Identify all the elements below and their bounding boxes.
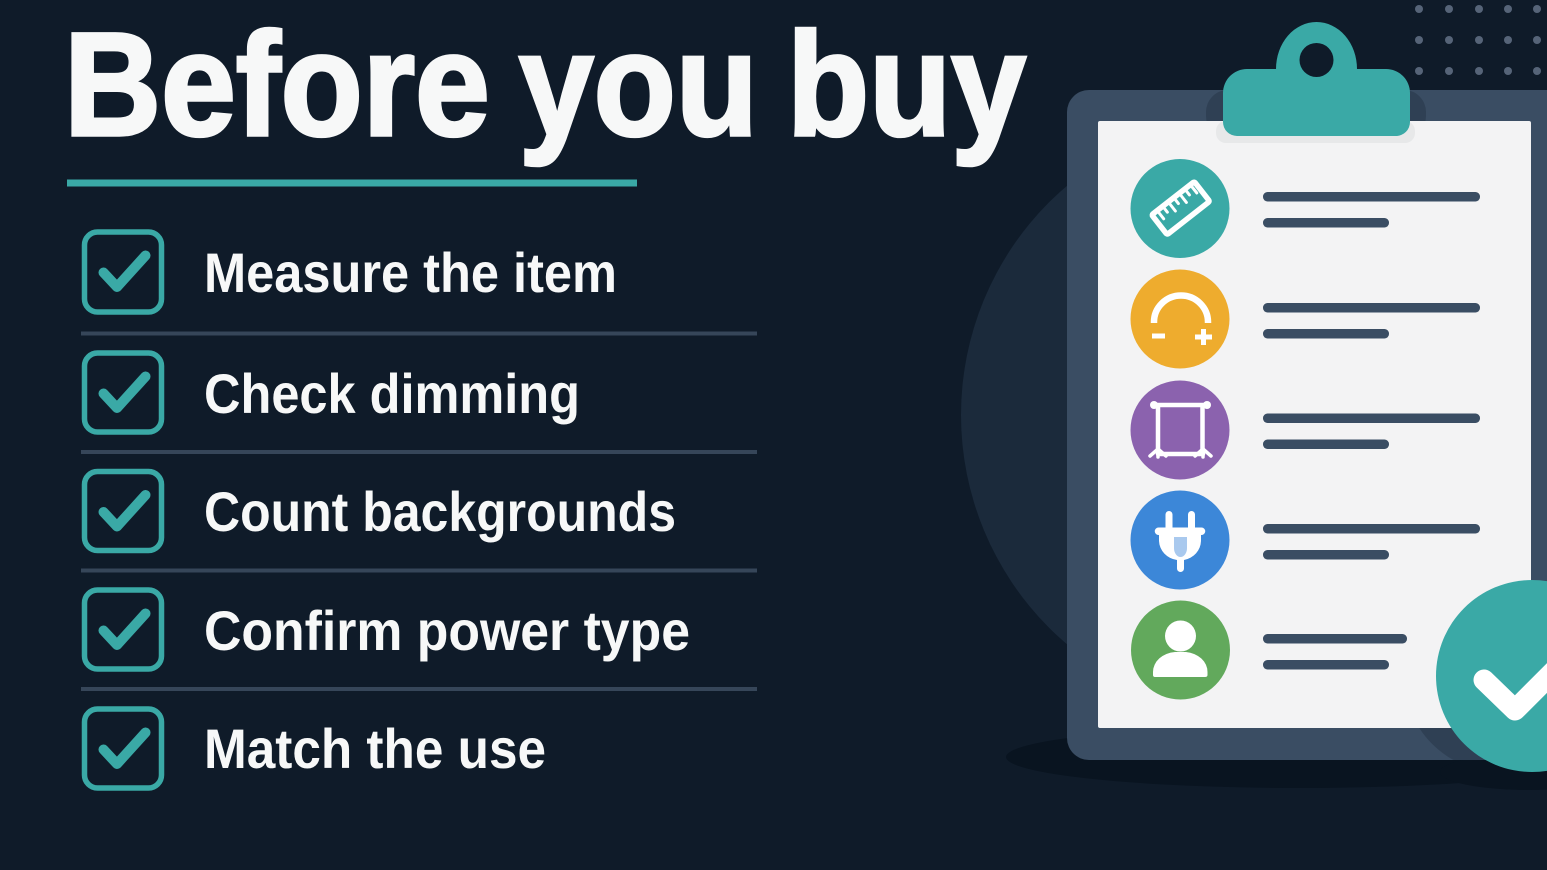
clipboard — [1067, 22, 1547, 760]
text lines — [1263, 192, 1480, 228]
row: confirm power type — [84, 590, 690, 669]
clipboard board — [1067, 90, 1547, 760]
row: check dimming — [84, 353, 580, 432]
text lines — [1263, 524, 1480, 560]
checkbox icon — [84, 590, 162, 669]
label: Count backgrounds — [204, 480, 676, 543]
item: power plug — [1130, 490, 1480, 590]
checkbox icon — [84, 353, 162, 432]
label: Match the use — [204, 717, 546, 780]
icon: backdrop stand — [1130, 380, 1230, 480]
icon: plug — [1130, 490, 1230, 590]
item: user — [1131, 600, 1407, 700]
row: measure the item — [84, 232, 617, 312]
checklist — [81, 232, 757, 788]
item: dimmer — [1130, 270, 1480, 368]
checkbox icon — [84, 232, 162, 312]
label: Measure the item — [204, 241, 617, 304]
clip shadow on board — [1206, 90, 1426, 138]
clip shadow on paper — [1216, 121, 1415, 143]
title: Before you buy — [64, 3, 1026, 167]
title underline — [67, 180, 637, 186]
icon: ruler — [1130, 159, 1230, 258]
text lines — [1263, 414, 1480, 449]
approval badge shadow — [1420, 728, 1485, 760]
dot pattern — [1415, 5, 1541, 75]
item: ruler — [1130, 159, 1480, 258]
icon: person — [1131, 600, 1230, 700]
text lines — [1263, 303, 1480, 338]
label: Check dimming — [204, 362, 580, 425]
checkbox icon — [84, 472, 162, 550]
label: Confirm power type — [204, 599, 690, 662]
approval badge — [1436, 580, 1547, 772]
background circle — [961, 114, 1547, 716]
clipboard shadow — [1006, 726, 1547, 790]
row: count backgrounds — [84, 472, 676, 550]
clip — [1223, 22, 1410, 136]
text lines — [1263, 634, 1407, 670]
icon: dimmer arc — [1130, 270, 1230, 368]
item: backdrop frame — [1130, 380, 1480, 480]
row: match the use — [84, 709, 546, 788]
paper sheet — [1098, 121, 1531, 728]
checkbox icon — [84, 709, 162, 788]
